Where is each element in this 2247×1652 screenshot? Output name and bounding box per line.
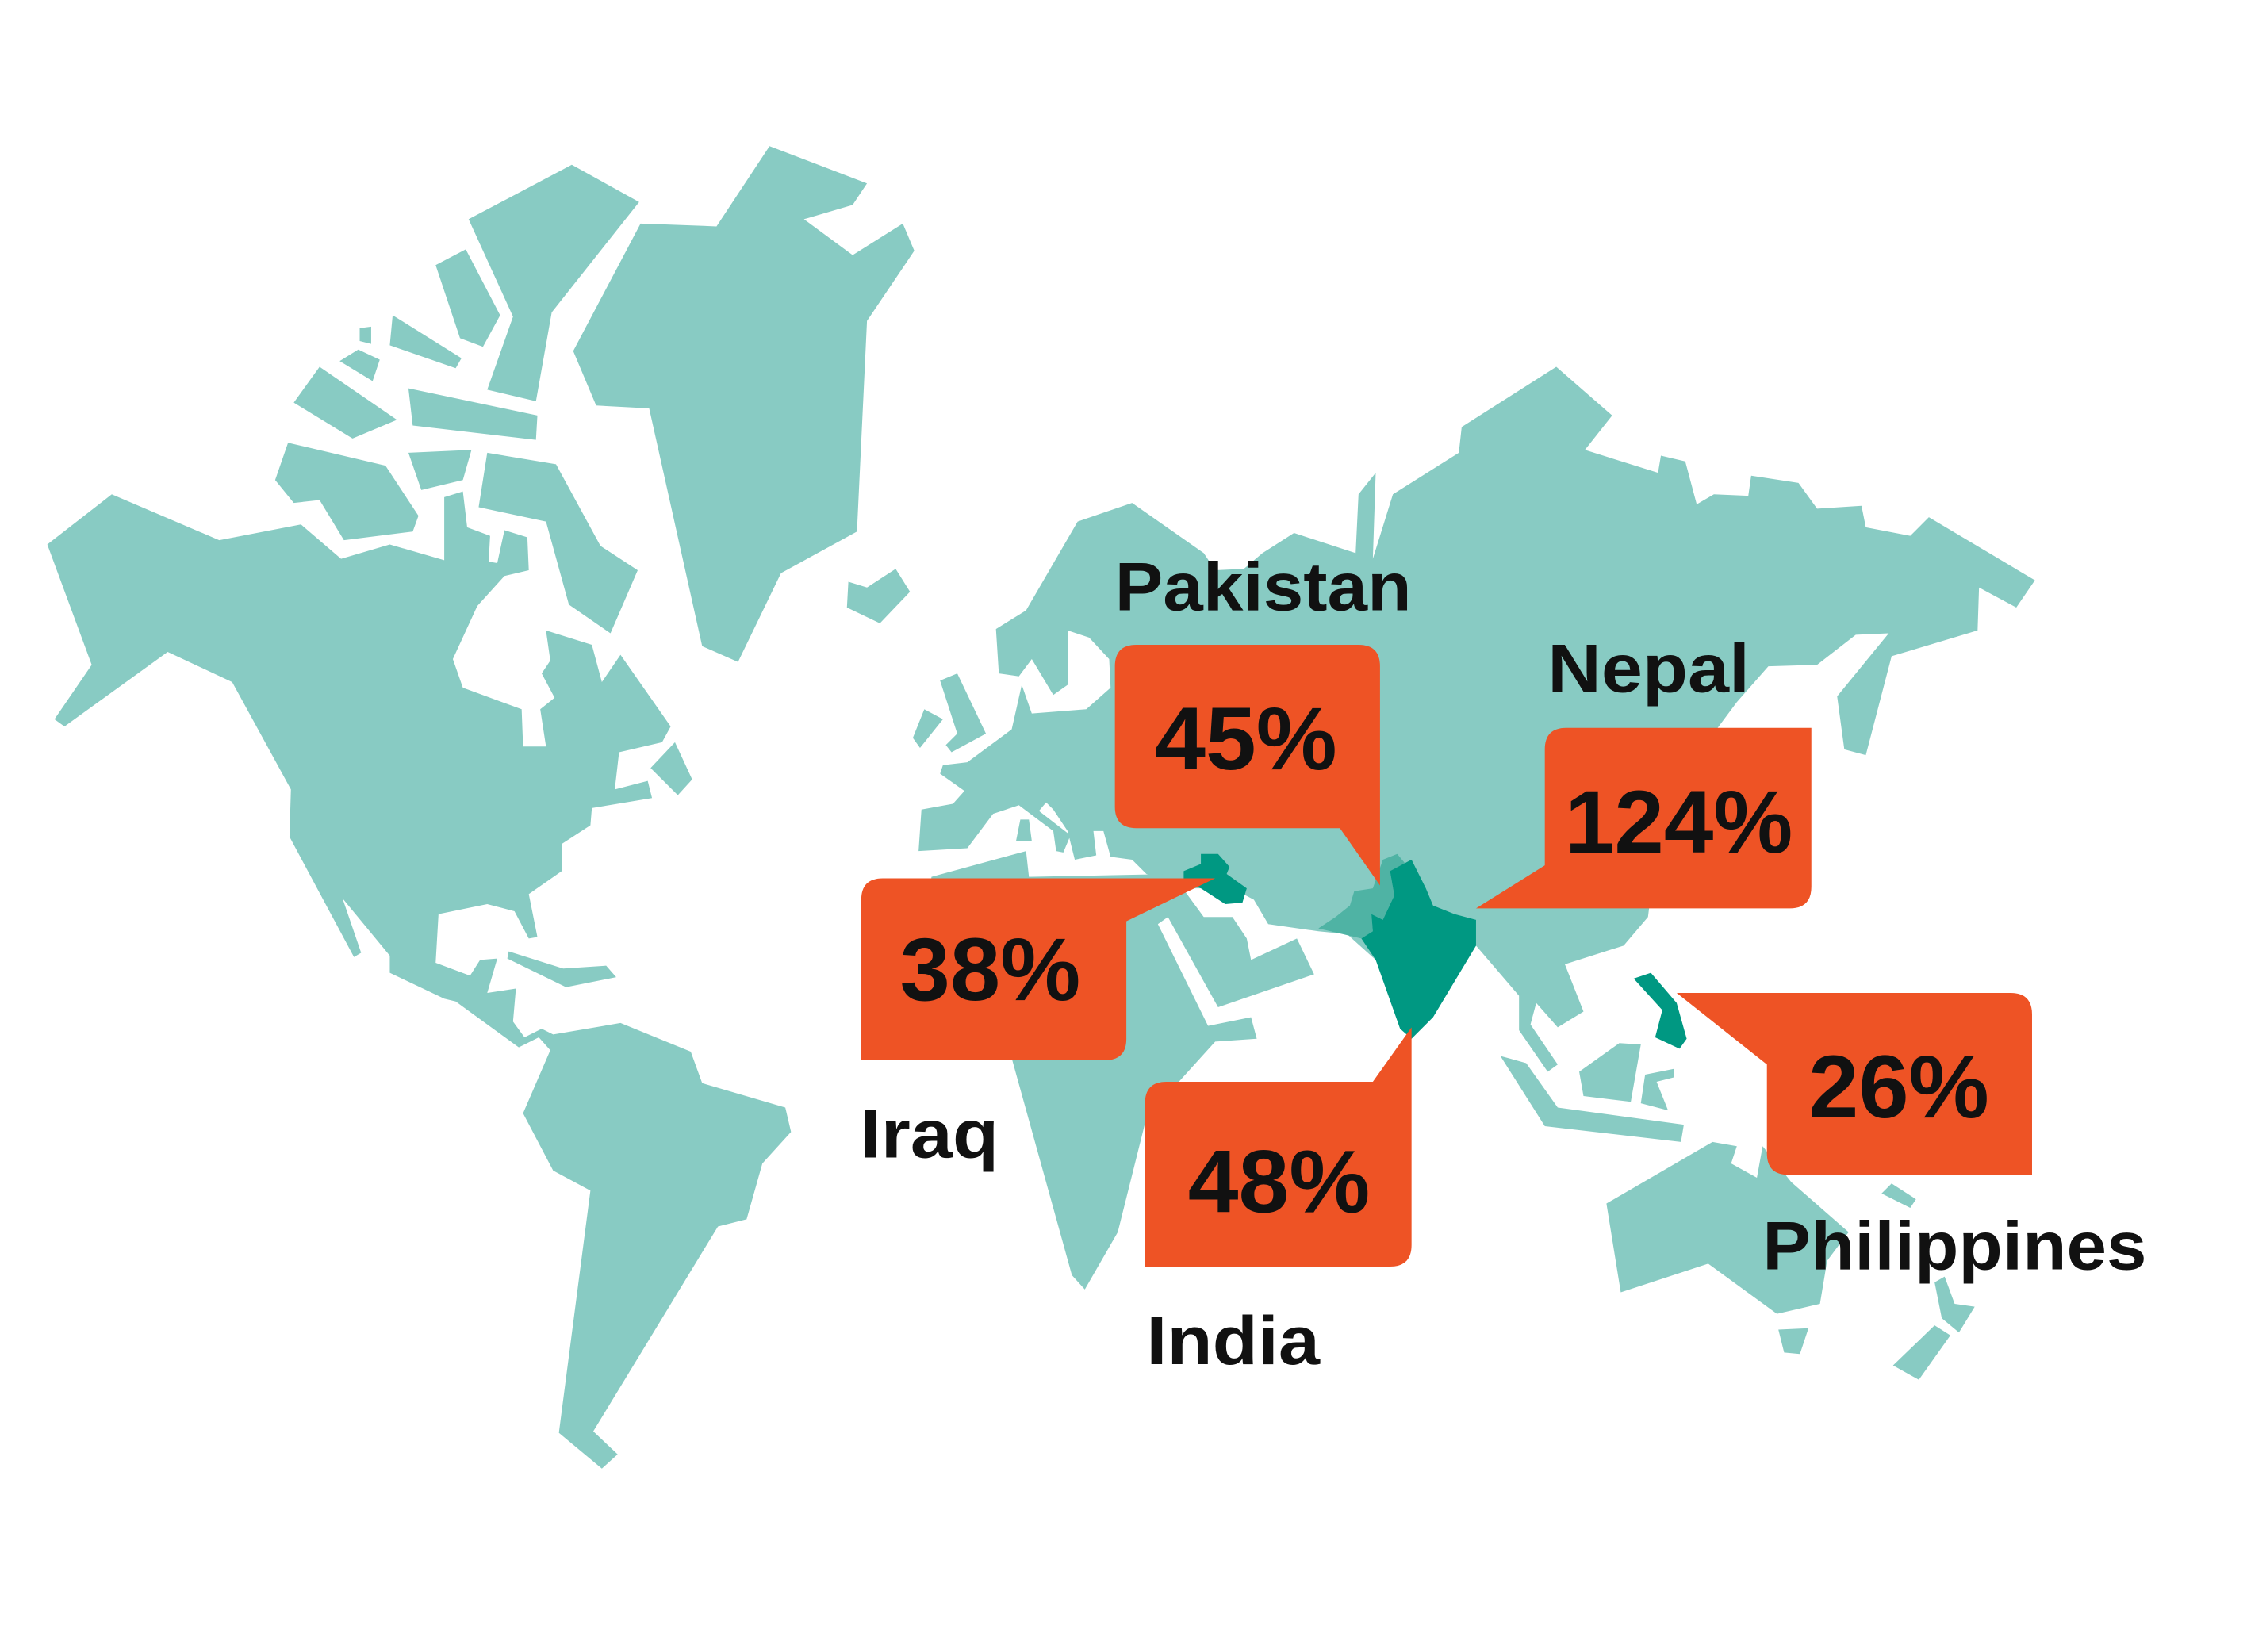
callout: Nepal (1476, 631, 1812, 908)
highlighted countries (1183, 854, 1687, 1048)
callout: Iraq: 38% (900, 920, 1080, 1019)
callout: Pakistan: Pakistan (1115, 549, 1412, 626)
callout: Nepal: 124% (1565, 772, 1793, 872)
country: India (1361, 860, 1476, 1039)
callout: Philippines: Philippines (1762, 1208, 2147, 1285)
world map (48, 146, 2035, 1469)
country: Pakistan (1318, 854, 1412, 938)
callout: Iraq: Iraq (860, 1096, 999, 1173)
callout: Pakistan: 45% (1155, 689, 1337, 788)
callout: Philippines (1677, 993, 2147, 1285)
callout: India: 48% (1188, 1132, 1370, 1231)
country: Iraq (1183, 854, 1247, 904)
callout: Nepal: Nepal (1547, 631, 1750, 707)
callout: India: India (1146, 1302, 1321, 1379)
callout: Pakistan (1115, 549, 1412, 885)
callout: Philippines: 26% (1808, 1037, 1989, 1136)
callout: India (1145, 1027, 1412, 1379)
callout: Iraq (860, 878, 1215, 1173)
country: Philippines (1634, 973, 1687, 1048)
